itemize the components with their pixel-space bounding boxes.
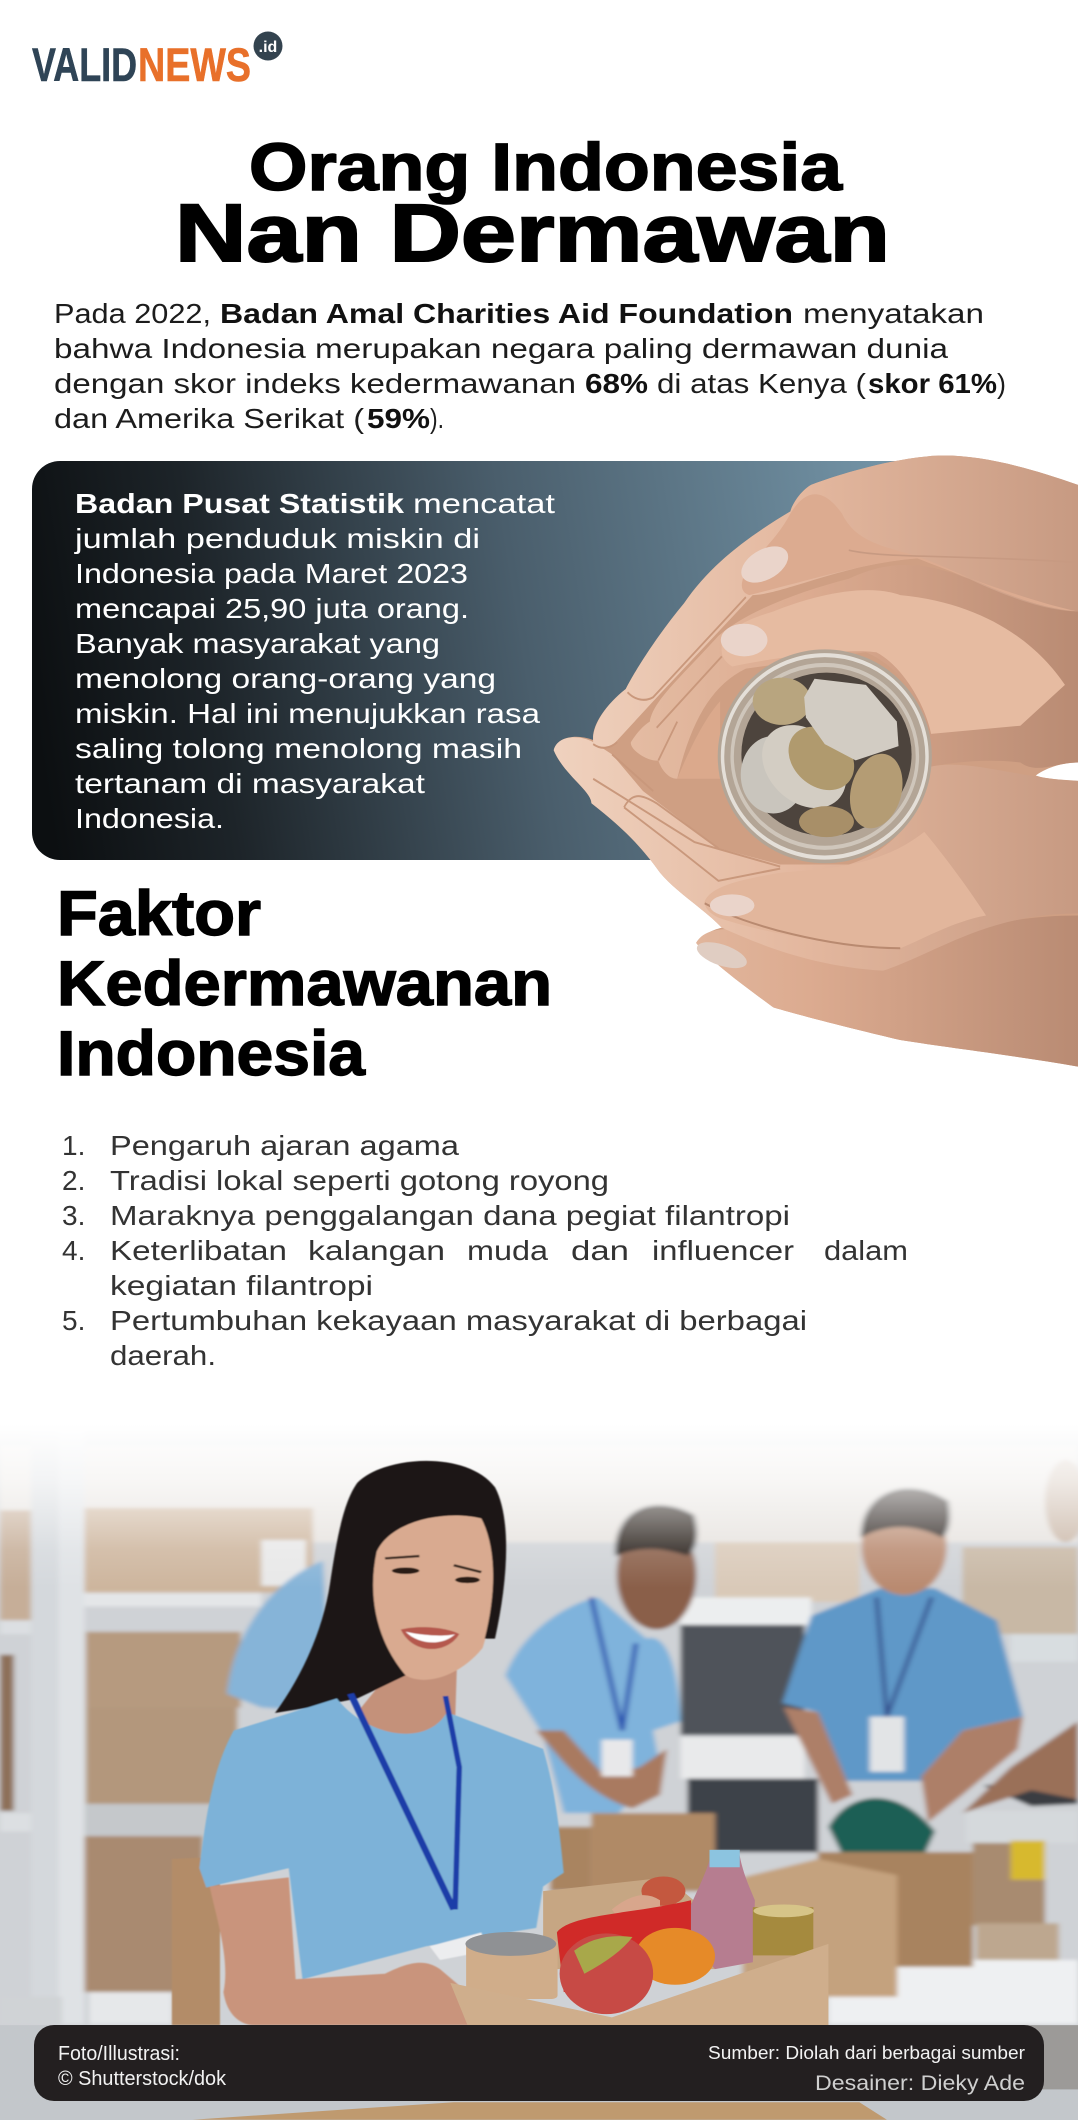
logo: Validnews.id: .id [259,39,277,56]
factors list: influencer [652,1235,794,1266]
lower thumb [705,832,986,948]
intro paragraph: bahwa Indonesia merupakan negara paling dermawan dunia [54,333,949,364]
intro paragraph: Badan Amal Charities Aid Foundation [220,298,793,329]
factors list: 1. [62,1130,85,1161]
factors list: Pengaruh ajaran agama [110,1130,459,1161]
hair [275,1461,506,1713]
heading: Faktor Kedermawanan Indonesia: Faktor [57,879,261,949]
intro paragraph: dan Amerika Serikat ( [54,403,365,434]
footer bar [34,2025,1044,2101]
factors list: daerah. [110,1340,216,1371]
right man [782,1588,1023,1781]
box of food donations [450,1850,828,2025]
logo: Validnews.id: VALID [32,38,137,91]
credit: source and designer [708,2043,1025,2095]
photo: volunteers packing donations [0,1395,1078,2120]
factors list: 4. [62,1235,85,1266]
arm [210,1877,483,2025]
main smiling woman [172,1461,564,2025]
panel: Badan Pusat Statistik [32,461,950,860]
warehouse background [0,1400,1078,2120]
credit: photo: © Shutterstock/dok [58,2068,227,2090]
heading: Faktor Kedermawanan Indonesia [57,879,552,1089]
panel text: Badan Pusat Statistik [75,488,404,519]
factors list: 2. [62,1165,85,1196]
lips and smile [401,1627,459,1649]
factors list: dalam [824,1235,908,1266]
intro paragraph: 59% [367,403,430,434]
panel text: menolong orang-orang yang [75,663,496,694]
panel text: Banyak masyarakat yang [75,628,440,659]
top outer hand [593,456,1078,748]
credit: source and designer: Desainer: Dieky Ade [815,2072,1025,2095]
factors list: Tradisi lokal seperti gotong royong [110,1165,609,1196]
factors list: dan [571,1235,629,1266]
lower foreground [0,2025,1078,2120]
panel text [74,488,555,834]
jar of coins [718,649,932,863]
neck [358,1657,457,1749]
intro paragraph: ) [997,368,1006,399]
face [373,1515,494,1680]
factors list: 5. [62,1305,85,1336]
intro paragraph: 68% [585,368,648,399]
hands silhouette [554,456,1078,1067]
factors list: Maraknya penggalangan dana pegiat filantropi [110,1200,790,1231]
icon: hands holding a jar of coins [554,456,1078,1067]
factors list: Keterlibatan [110,1235,287,1266]
logo: Validnews.id: NEWS [138,38,251,91]
back person left [227,1561,330,1712]
intro paragraph: menyatakan [803,298,984,329]
factors list [62,1130,908,1371]
intro paragraph: ). [430,403,444,434]
credit: photo [58,2043,227,2090]
panel text: jumlah penduduk miskin di [74,523,480,554]
credit: photo: Foto/Illustrasi: [58,2043,180,2065]
index finger [722,590,1065,734]
intro paragraph: skor 61% [868,368,997,399]
shopping bag behind arm [172,1857,220,2025]
panel text: mencapai 25,90 juta orang. [75,593,469,624]
intro paragraph: Pada 2022, [54,298,211,329]
panel text: saling tolong menolong masih [75,733,522,764]
panel text: mencatat [413,488,555,519]
title: Nan Dermawan [175,188,890,279]
factors list: kegiatan filantropi [110,1270,373,1301]
heading: Faktor Kedermawanan Indonesia: Kedermawanan [57,949,552,1019]
eyes and brows [392,1568,419,1574]
panel text: miskin. Hal ini menujukkan rasa [75,698,540,729]
factors list: 3. [62,1200,85,1231]
intro paragraph: di atas Kenya ( [657,368,867,399]
intro paragraph [54,298,1006,434]
title: Orang Indonesia [249,130,843,205]
heading: Faktor Kedermawanan Indonesia: Indonesia [57,1019,366,1089]
panel text: Indonesia. [75,803,224,834]
middle hand [631,565,1078,779]
center woman [505,1597,681,1813]
shirt [199,1698,564,1979]
intro paragraph: dengan skor indeks kedermawanan [54,368,576,399]
credit: source and designer: Sumber: Diolah dari berbagai sumber [708,2043,1025,2063]
factors list: muda [467,1235,548,1266]
title [175,130,890,279]
lower cupped hand [554,737,1078,971]
panel text: Indonesia pada Maret 2023 [75,558,468,589]
logo: Validnews.id [32,32,282,91]
lanyard [351,1694,454,1909]
factors list: kalangan [308,1235,445,1266]
top white fade [0,1395,1078,1588]
upper thumb [742,494,1078,611]
panel text: tertanam di masyarakat [75,768,425,799]
lowest hand [696,916,1078,1067]
factors list: Pertumbuhan kekayaan masyarakat di berbagai [110,1305,807,1336]
